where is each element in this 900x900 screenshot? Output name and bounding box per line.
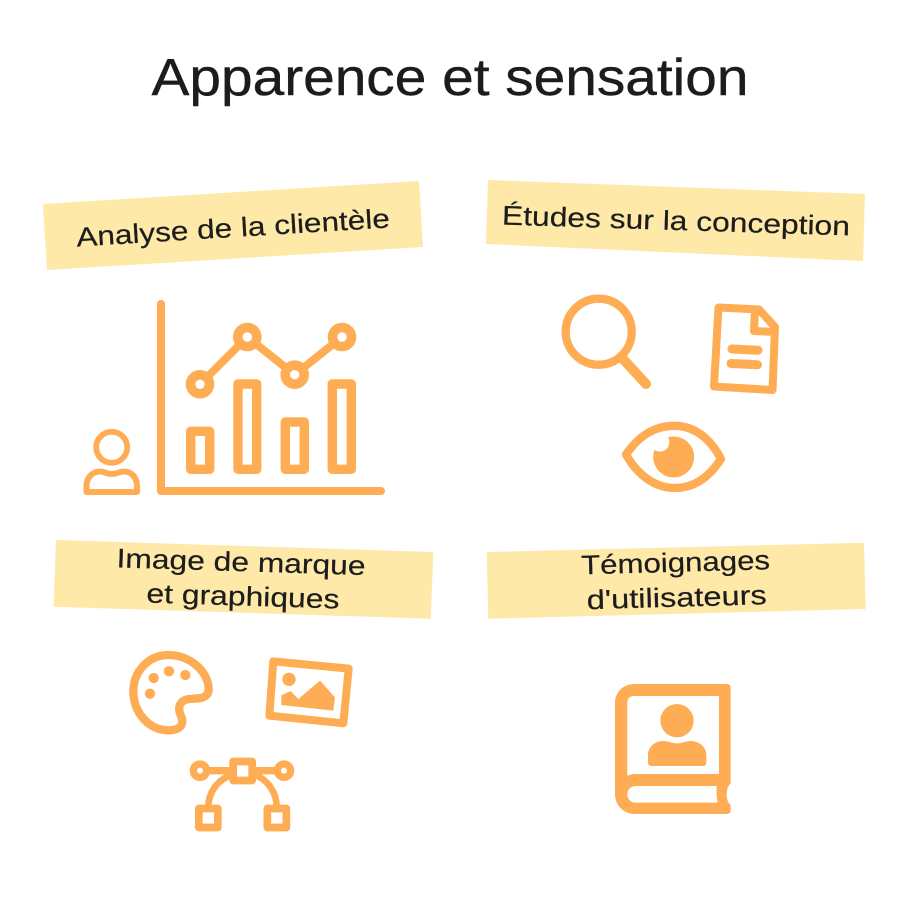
- label background: études: [486, 180, 865, 261]
- icon: picture: [269, 661, 349, 723]
- label background: image de marque: [54, 540, 433, 619]
- icon: book with user: [615, 684, 731, 814]
- panel: image de marque et graphiques: [54, 540, 433, 827]
- heading: image de marque: [116, 543, 366, 614]
- title: Apparence et sensation: [152, 49, 748, 107]
- panel: analyse de la clientèle: [43, 181, 423, 492]
- heading: image de marque: Image de marque: [116, 543, 366, 581]
- icon: chart with user: [86, 304, 381, 492]
- panel: études sur la conception: [486, 180, 865, 488]
- heading: témoignages: d'utilisateurs: [586, 580, 767, 615]
- heading: image de marque: et graphiques: [146, 579, 340, 614]
- icon: palette: [133, 655, 209, 730]
- icon: document: [714, 308, 775, 390]
- icon: magnifier: [566, 299, 646, 384]
- heading: témoignages: Témoignages: [581, 545, 770, 580]
- panel: témoignages d'utilisateurs: [487, 543, 866, 814]
- icon: bezier curve: [193, 761, 291, 827]
- label background: analyse: [43, 181, 423, 270]
- heading: analyse: Analyse de la clientèle: [75, 203, 391, 253]
- heading: études: Études sur la conception: [502, 201, 850, 241]
- icon: eye: [626, 426, 721, 488]
- label background: témoignages: [487, 543, 866, 619]
- heading: témoignages: [581, 545, 770, 615]
